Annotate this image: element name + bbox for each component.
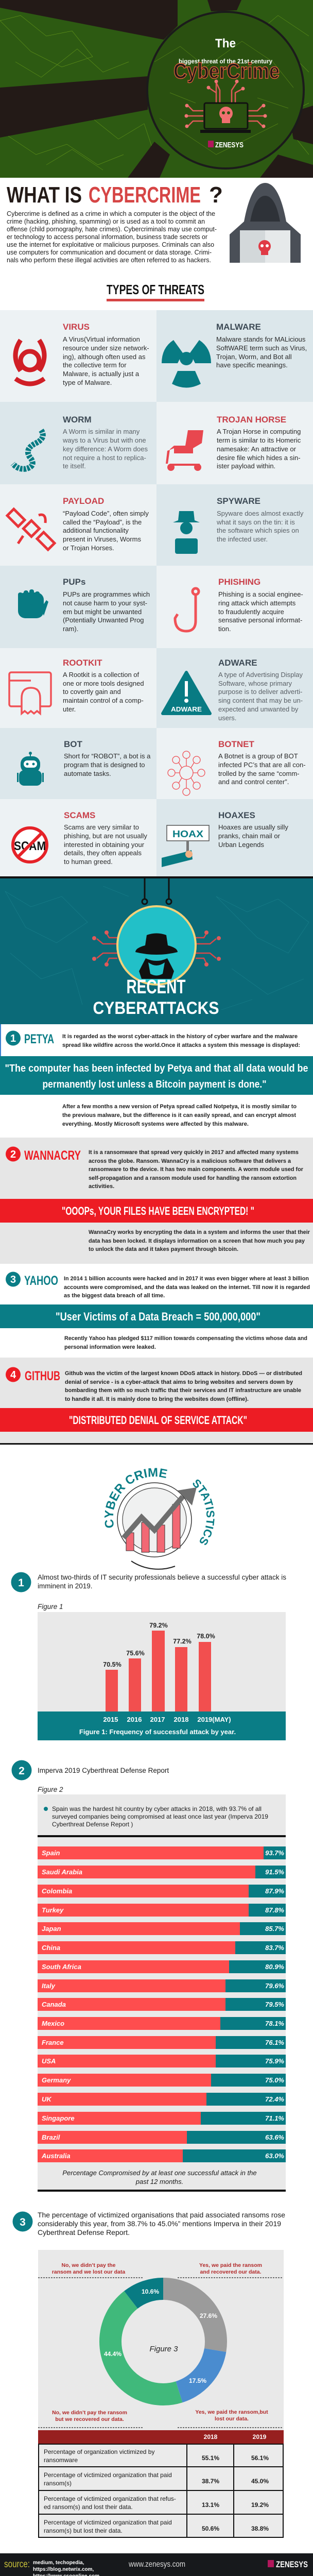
card: payload: additional functionality bbox=[63, 527, 129, 534]
bar chart: percentage compromised by country: Spain was the hardest hit country by cyber attacks in 2018, with 93.7% of all bbox=[52, 1805, 262, 1812]
attack 2: wannacry: activities. bbox=[89, 1183, 114, 1190]
card: scams: to human greed. bbox=[64, 858, 113, 866]
card: hoaxes: pranks, chain mail or bbox=[218, 832, 281, 840]
text block: notpetya: After a few months a new version of Petya spread called Notpetya, it is mostly similar to bbox=[62, 1104, 297, 1110]
bar chart: percentage compromised by country: UK bbox=[42, 2095, 52, 2103]
title: The biggest threat CyberCrime bbox=[173, 37, 280, 83]
card: payload: PAYLOAD bbox=[63, 496, 104, 506]
stat 2: imperva report: Figure 2 bbox=[38, 1786, 63, 1793]
card: phishing: to fraudulently acquire bbox=[218, 608, 284, 616]
stat 2: imperva report bbox=[11, 1760, 169, 1793]
text block: cybercrime definition: use the internet for exploitative or malicious purposes. Criminals can also bbox=[7, 241, 214, 248]
stat 3: ransom payments: Cyberthreat Defense Report. bbox=[38, 2228, 130, 2236]
table: ransomware statistics 2018 vs 2019: 13.1% bbox=[202, 2501, 219, 2509]
bar chart: frequency of successful attack by year: 70.5% bbox=[103, 1661, 121, 1668]
title: The biggest threat CyberCrime: CyberCrime bbox=[173, 59, 280, 83]
card: virus bbox=[15, 322, 149, 386]
table: ransomware statistics 2018 vs 2019: ransom(s) bbox=[44, 2480, 72, 2487]
donut chart: figure 3 ransom outcomes: 17.5% bbox=[189, 2377, 206, 2384]
callout: encrypted banner bbox=[0, 1199, 313, 1223]
bar chart: percentage compromised by country: past 12 months. bbox=[135, 2178, 183, 2185]
card: adware: sing content that may be un- bbox=[218, 697, 303, 704]
bar chart: percentage compromised by country: 72.4% bbox=[265, 2095, 284, 2103]
card: malware: have specific meanings. bbox=[216, 361, 288, 369]
bar chart: frequency of successful attack by year: 2017 bbox=[150, 1716, 165, 1723]
card: bot: BOT bbox=[64, 739, 82, 749]
bar chart: frequency of successful attack by year: 2019(MAY) bbox=[197, 1716, 231, 1723]
bar chart: frequency of successful attack by year: 75.6% bbox=[126, 1650, 145, 1657]
card: PUPs bbox=[18, 577, 150, 633]
table: ransomware statistics 2018 vs 2019: Percentage of organization victimized by bbox=[44, 2448, 154, 2455]
attack 4: github bbox=[0, 1358, 313, 1408]
bar chart: frequency of successful attack by year: Figure 1: Frequency of successful attack by year. bbox=[79, 1728, 236, 1736]
card: scams: interested in obtaining your bbox=[64, 841, 145, 849]
title: The biggest threat CyberCrime: biggest threat of the 21st century bbox=[179, 58, 272, 65]
icon: cyber crime statistics badge: STATISTICS bbox=[193, 1480, 215, 1545]
bar chart: percentage compromised by country: 71.1% bbox=[265, 2114, 284, 2122]
card: trojan horse: A Trojan Horse in computing bbox=[217, 428, 301, 435]
heading: recent cyberattacks bbox=[93, 976, 219, 1018]
card: botnet: and and control center”. bbox=[218, 778, 289, 786]
bar chart: percentage compromised by country: USA bbox=[42, 2057, 56, 2065]
attack 2: wannacry: ransomware to the device. It has two main components. A worm module used for bbox=[89, 1166, 304, 1173]
attack 1: petya: 1 bbox=[10, 1033, 16, 1044]
card: virus: type of Malware. bbox=[63, 379, 112, 386]
card: rootkit: A Rootkit is a collection of bbox=[63, 671, 140, 679]
bar chart: percentage compromised by country: Australia bbox=[41, 2152, 71, 2160]
stat 2: imperva report: 2 bbox=[19, 1765, 25, 1777]
stat 2: imperva report: Imperva 2019 Cyberthreat Defense Report bbox=[38, 1767, 169, 1774]
stat 3: ransom payments: The percentage of victimized organisations that paid associated ransoms rose bbox=[38, 2211, 285, 2219]
card: spyware bbox=[173, 496, 304, 554]
bar chart: percentage compromised by country: 76.1% bbox=[265, 2039, 284, 2046]
bar chart: percentage compromised by country: China bbox=[42, 1944, 60, 1952]
stat 1: attack imminent bbox=[11, 1572, 286, 1611]
bar chart: percentage compromised by country: South Africa bbox=[42, 1963, 81, 1971]
card: phishing: sensative personal informat- bbox=[218, 616, 302, 624]
donut chart: figure 3 ransom outcomes: but we recovered our data. bbox=[55, 2416, 124, 2422]
card: hoaxes: HOAX bbox=[172, 829, 203, 839]
table: ransomware statistics 2018 vs 2019: 50.6% bbox=[202, 2525, 219, 2532]
card: hoaxes bbox=[162, 810, 288, 867]
card: PUPs: ram). bbox=[63, 625, 78, 633]
donut chart: figure 3 ransom outcomes: Figure 3 bbox=[149, 2345, 178, 2353]
donut chart: figure 3 ransom outcomes: 10.6% bbox=[142, 2288, 159, 2295]
icon: hand bbox=[18, 589, 48, 618]
attack 4: github: bombarding them with so much traffic that their services and IT infrastructure are unable bbox=[65, 1387, 301, 1394]
attack 1: petya: spread like wildfire across the world.Once it attacks a system this message is displayed: bbox=[62, 1042, 300, 1048]
card: worm: key difference: A Worm does bbox=[63, 445, 148, 453]
text block: cybercrime definition bbox=[7, 210, 217, 264]
table: ransomware statistics 2018 vs 2019: 2019 bbox=[253, 2433, 267, 2441]
attack 4: github: 4 bbox=[10, 1369, 16, 1381]
icon: cyber crime statistics badge bbox=[104, 1468, 215, 1570]
card: bot bbox=[17, 739, 151, 786]
card: virus: A Virus(Virtual information bbox=[63, 335, 140, 343]
attack 1: petya: It is regarded as the worst cyber-attack in the history of cyber warfare and the malware bbox=[62, 1033, 298, 1040]
donut chart: figure 3 ransom outcomes: ransom and we lost our data bbox=[52, 2269, 125, 2275]
card: PUPs: not cause harm to your syst- bbox=[63, 599, 147, 607]
table: ransomware statistics 2018 vs 2019: 38.7% bbox=[202, 2478, 219, 2485]
table: ransomware statistics 2018 vs 2019: 55.1% bbox=[202, 2454, 219, 2462]
donut chart: figure 3 ransom outcomes: and recovered our data. bbox=[200, 2269, 262, 2275]
bar chart: percentage compromised by country: 80.9% bbox=[265, 1963, 284, 1971]
text block: notpetya: everything. Mostly Microsoft systems were affected by this malware. bbox=[62, 1121, 249, 1127]
card: rootkit: to covertly gain and bbox=[63, 688, 121, 696]
icon: hoax sign bbox=[167, 825, 209, 841]
callout: petya quote: permanently lost unless a Bitcoin payment is done." bbox=[42, 1079, 267, 1090]
heading: What is cybercrime: CYBERCRIME bbox=[89, 182, 201, 208]
card: hoaxes: HOAXES bbox=[218, 810, 255, 820]
bar chart: percentage compromised by country: 85.7% bbox=[265, 1925, 284, 1933]
card: scams: SCAM bbox=[14, 839, 46, 853]
attack 3: yahoo: In 2014 1 billion accounts were hacked and in 2017 it was even bigger where at least 3 billion bbox=[64, 1276, 309, 1282]
icon: robot bbox=[17, 752, 44, 786]
card: malware bbox=[162, 322, 307, 387]
attack 1: petya: PETYA bbox=[24, 1032, 54, 1046]
card: trojan horse: namesake: An attractive or bbox=[217, 445, 297, 453]
card: adware: expected and unwanted by bbox=[218, 705, 299, 713]
card: rootkit: ROOTKIT bbox=[63, 658, 102, 668]
donut chart: figure 3 ransom outcomes: No, we didn’t pay the bbox=[61, 2262, 116, 2268]
bar chart: frequency of successful attack by year bbox=[38, 1612, 286, 1740]
table: ransomware statistics 2018 vs 2019: 19.2% bbox=[251, 2501, 269, 2509]
bar chart: percentage compromised by country: Colombia bbox=[42, 1887, 72, 1895]
callout: ddos banner: "DISTRIBUTED DENIAL OF SERVICE ATTACK" bbox=[69, 1414, 247, 1427]
bar chart: percentage compromised by country: France bbox=[42, 2039, 64, 2046]
text block: yahoo compensation: personal information were leaked. bbox=[64, 1344, 156, 1350]
icon: cyber crime statistics badge: CYBER CRIME bbox=[104, 1468, 167, 1528]
text block: cybercrime definition: er technology to access personal information, business trade secrets or bbox=[7, 233, 207, 241]
icon: botnet bbox=[168, 751, 205, 795]
bar chart: frequency of successful attack by year: 79.2% bbox=[149, 1622, 168, 1629]
icon: hook bbox=[175, 588, 199, 631]
card: PUPs: PUPs are programmes which bbox=[63, 590, 150, 598]
card: worm bbox=[13, 415, 148, 470]
card: spyware: SPYWARE bbox=[217, 496, 260, 506]
heading: What is cybercrime bbox=[7, 182, 223, 208]
icon: worm bbox=[13, 430, 43, 469]
card: worm: ways to a Virus but with one bbox=[62, 436, 146, 444]
bar chart: percentage compromised by country: 79.6% bbox=[265, 1982, 284, 1990]
callout: yahoo victims: "User Victims of a Data Breach = 500,000,000" bbox=[56, 1310, 260, 1323]
card: virus: Malware, is actually just a bbox=[63, 370, 140, 378]
bar chart: percentage compromised by country: 79.5% bbox=[265, 2001, 284, 2008]
bar chart: percentage compromised by country bbox=[38, 1794, 286, 2192]
card: payload bbox=[7, 496, 149, 552]
table: ransomware statistics 2018 vs 2019: Percentage of victimized organization that paid bbox=[44, 2519, 172, 2526]
bar chart: percentage compromised by country: Germany bbox=[42, 2076, 71, 2084]
card: adware: Software, whose primary bbox=[218, 680, 292, 687]
card: bot: automate tasks. bbox=[64, 770, 111, 777]
card: trojan horse bbox=[166, 415, 301, 471]
bar chart: percentage compromised by country: Saudi Arabia bbox=[42, 1868, 82, 1876]
card: adware: users. bbox=[218, 714, 236, 722]
text block: wannacry works: to unlock the data and it takes payment through bitcoin. bbox=[89, 1246, 238, 1252]
card: adware: purpose is to deliver adverti- bbox=[218, 688, 302, 696]
bar chart: percentage compromised by country: Brazil bbox=[42, 2133, 60, 2141]
card: hoaxes: Urban Legends bbox=[218, 841, 264, 849]
card: bot: Short for “ROBOT”, a bot is a bbox=[64, 752, 151, 760]
bar chart: frequency of successful attack by year: 2018 bbox=[174, 1716, 188, 1723]
donut chart: figure 3 ransom outcomes: lost our data. bbox=[215, 2416, 249, 2422]
bar chart: percentage compromised by country: 91.5% bbox=[265, 1868, 284, 1876]
card: trojan horse: ister payload within. bbox=[217, 462, 275, 470]
table: ransomware statistics 2018 vs 2019: 38.8% bbox=[251, 2525, 269, 2532]
title: The biggest threat CyberCrime: The bbox=[215, 37, 236, 50]
icon: radiation bbox=[162, 340, 211, 387]
card: adware: A type of Advertising Display bbox=[218, 671, 303, 679]
stat 1: attack imminent: imminent in 2019. bbox=[38, 1582, 93, 1590]
card: rootkit: uter. bbox=[63, 705, 76, 713]
logo: ZENESYS header: ZENESYS bbox=[215, 141, 244, 149]
attack 4: github: Github was the victim of the largest known DDoS attack in history. DDoS — or distributed bbox=[65, 1370, 302, 1377]
footer website: www.zenesys.com bbox=[128, 2560, 185, 2569]
bar chart: percentage compromised by country: 75.9% bbox=[265, 2057, 284, 2065]
icon: satellite bbox=[7, 509, 55, 550]
attack 2: wannacry: 2 bbox=[10, 1149, 16, 1160]
attack 4: github: to handle it all. It is mainly done to bring the websites down (offline). bbox=[65, 1396, 249, 1402]
card: malware: MALWARE bbox=[216, 322, 261, 332]
bar chart: percentage compromised by country: Singapore bbox=[42, 2114, 75, 2122]
card: spyware: the infected user. bbox=[217, 535, 268, 543]
bar chart: frequency of successful attack by year: 77.2% bbox=[173, 1638, 192, 1645]
card: bot: program that is designed to bbox=[64, 761, 145, 769]
callout: petya quote bbox=[0, 1056, 313, 1095]
attack 4: github: denial of service - is a cyber-attack that aims to bring websites and servers down by bbox=[65, 1379, 293, 1385]
card: adware: ADWARE bbox=[171, 705, 202, 713]
callout: yahoo victims bbox=[0, 1304, 313, 1328]
card: virus: VIRUS bbox=[63, 322, 90, 332]
card: PUPs: (Potentially Unwanted Prog bbox=[63, 616, 144, 624]
icon: hacker in circle with wires bbox=[92, 878, 221, 985]
card: adware: ADWARE bbox=[218, 658, 257, 668]
text block: notpetya bbox=[62, 1104, 297, 1127]
card: scams: details, they often appeals bbox=[64, 849, 142, 857]
bar chart: percentage compromised by country: surveyed companies being compromised at least once last year (Imperva 2019 bbox=[52, 1813, 268, 1820]
bar chart: percentage compromised by country: Turkey bbox=[42, 1906, 64, 1914]
heading: What is cybercrime: WHAT IS bbox=[7, 182, 82, 208]
stat 1: attack imminent: Figure 1 bbox=[38, 1603, 63, 1611]
table: ransomware statistics 2018 vs 2019: ransom(s) but lost their data. bbox=[44, 2527, 123, 2534]
card: PUPs: em but might be unwanted bbox=[63, 608, 142, 616]
text block: wannacry works: data has been locked. It displays information on a screen that how much you pay bbox=[89, 1238, 305, 1244]
heading: recent cyberattacks: RECENT bbox=[127, 976, 185, 998]
bar chart: percentage compromised by country: 63.0% bbox=[265, 2152, 284, 2160]
footer sources: source: bbox=[4, 2559, 30, 2570]
card: spyware: what it says on the tin: it is bbox=[216, 518, 295, 526]
card: malware: SoftWARE term such as Virus, bbox=[216, 344, 307, 352]
heading: recent cyberattacks: CYBERATTACKS bbox=[93, 998, 219, 1018]
card: adware bbox=[163, 658, 303, 722]
text block: notpetya: the previous malware, but the difference is it can easily spread, and can encrypt almost bbox=[62, 1112, 296, 1118]
card: payload: present in Viruses, Worms bbox=[63, 535, 141, 543]
table: ransomware statistics 2018 vs 2019: 45.0% bbox=[251, 2478, 269, 2485]
card: spyware: Spyware does almost exactly bbox=[217, 510, 304, 517]
card: botnet bbox=[168, 739, 306, 795]
stat 3: ransom payments bbox=[12, 2211, 285, 2236]
donut chart: figure 3 ransom outcomes: No, we didn’t pay the ransom bbox=[52, 2410, 127, 2416]
bar chart: percentage compromised by country: 83.7% bbox=[265, 1944, 284, 1952]
card: worm: te itself. bbox=[63, 462, 86, 470]
bar chart: frequency of successful attack by year: 2015 bbox=[103, 1716, 118, 1723]
icon: spy bbox=[173, 511, 200, 554]
icon: trojan horse bbox=[166, 430, 203, 471]
bar chart: frequency of successful attack by year: 78.0% bbox=[197, 1633, 215, 1640]
text block: wannacry works: WannaCry works by encrypting the data in a system and informs the user that their bbox=[89, 1229, 310, 1235]
heading: types of threats: TYPES OF THREATS bbox=[107, 282, 204, 297]
donut chart: figure 3 ransom outcomes bbox=[38, 2250, 284, 2430]
card: botnet: A Botnet is a group of BOT bbox=[218, 752, 298, 760]
table: ransomware statistics 2018 vs 2019: 56.1% bbox=[251, 2454, 269, 2462]
bar chart: percentage compromised by country: Japan bbox=[42, 1925, 61, 1933]
attack 4: github: GITHUB bbox=[25, 1369, 60, 1383]
card: scams: SCAMS bbox=[64, 810, 95, 820]
card: malware: Trojan, Worm, and Bot all bbox=[216, 353, 292, 361]
bar chart: percentage compromised by country: Cyberthreat Defense Report ) bbox=[52, 1821, 133, 1828]
attack 3: yahoo: YAHOO bbox=[24, 1274, 58, 1288]
icon: no scam bbox=[13, 828, 47, 862]
bar chart: percentage compromised by country: Italy bbox=[42, 1982, 56, 1990]
card: payload: “Payload Code”, often simply bbox=[63, 510, 149, 517]
attack 3: yahoo: accounts were compromised, and the data was leaked on the internet. Till now it is regarded bbox=[64, 1284, 310, 1291]
text block: cybercrime definition: use computers for communication and document or data storage. Crimi- bbox=[7, 249, 212, 256]
attack 2: wannacry: It is a ransomware that spread very quickly in 2017 and affected many systems bbox=[89, 1149, 299, 1156]
card: rootkit: maintain control of a comp- bbox=[63, 697, 144, 704]
card: virus: resource under size network- bbox=[63, 344, 149, 352]
icon: skull laptop with circuits bbox=[184, 79, 267, 133]
card: virus: the collective term for bbox=[63, 361, 127, 369]
table: ransomware statistics 2018 vs 2019: ed ransom(s) and lost their data. bbox=[44, 2503, 133, 2511]
card: malware: Malware stands for MALicious bbox=[216, 335, 306, 343]
stat 1: attack imminent: Almost two-thirds of IT security professionals believe a successful cyber attack is bbox=[38, 1573, 286, 1581]
card: worm: A Worm is similar in many bbox=[63, 428, 140, 435]
heading: types of threats bbox=[107, 282, 204, 301]
footer sources: https://blog.netwrix.com, bbox=[33, 2567, 94, 2572]
card: phishing: Phishing is a social enginee- bbox=[218, 590, 303, 598]
card: scams: phishing, but are not usually bbox=[64, 832, 147, 840]
card: PUPs: PUPs bbox=[63, 577, 85, 587]
bar chart: percentage compromised by country: Spain bbox=[42, 1849, 60, 1857]
stat 1: attack imminent: 1 bbox=[18, 1577, 24, 1589]
card: phishing: tion. bbox=[218, 625, 231, 633]
text block: wannacry works bbox=[0, 1223, 313, 1264]
card: hoaxes: Hoaxes are usually silly bbox=[218, 823, 288, 831]
bar chart: percentage compromised by country: Mexico bbox=[42, 2020, 64, 2027]
footer sources: medium, techopedia, bbox=[33, 2560, 84, 2566]
donut chart: figure 3 ransom outcomes: 44.4% bbox=[104, 2350, 121, 2358]
bar chart: percentage compromised by country: Percentage Compromised by at least one successful attack in the bbox=[62, 2169, 257, 2177]
card: scams bbox=[13, 810, 147, 866]
attack 2: wannacry: WANNACRY bbox=[24, 1148, 81, 1163]
card: rootkit: one or more tools designed bbox=[63, 680, 144, 687]
table: ransomware statistics 2018 vs 2019: ransomware bbox=[44, 2456, 78, 2464]
card: worm: WORM bbox=[63, 415, 92, 425]
donut chart: figure 3 ransom outcomes: 27.6% bbox=[200, 2312, 217, 2319]
stat 3: ransom payments: 3 bbox=[20, 2216, 26, 2228]
panel: threats grid bbox=[0, 310, 313, 877]
donut chart: figure 3 ransom outcomes: Yes, we paid the ransom,but bbox=[195, 2409, 268, 2415]
card: botnet: BOTNET bbox=[218, 739, 254, 749]
attack 3: yahoo: 3 bbox=[10, 1274, 16, 1285]
footer sources bbox=[4, 2559, 101, 2576]
card: payload: called the “Payload”, is the bbox=[63, 518, 142, 526]
footer bbox=[0, 2553, 313, 2576]
text block: yahoo compensation: Recently Yahoo has pledged $117 million towards compensating the victims whose data and bbox=[64, 1335, 307, 1342]
card: trojan horse: desire file which hides a sin- bbox=[217, 454, 301, 462]
card: phishing bbox=[175, 577, 303, 633]
table: ransomware statistics 2018 vs 2019 bbox=[38, 2430, 284, 2537]
bar chart: frequency of successful attack by year: 2016 bbox=[127, 1716, 142, 1723]
card: phishing: ring attack which attempts bbox=[218, 599, 296, 607]
table: ransomware statistics 2018 vs 2019: 2018 bbox=[204, 2433, 218, 2441]
card: trojan horse: TROJAN HORSE bbox=[217, 415, 286, 425]
icon: biohazard bbox=[15, 340, 44, 384]
card: virus: ing), although often used as bbox=[63, 353, 146, 361]
icon: ghost window bbox=[9, 672, 51, 714]
card: botnet: trolled by the same “comm- bbox=[218, 770, 300, 777]
table: ransomware statistics 2018 vs 2019: Percentage of victimized organization that paid bbox=[44, 2471, 172, 2479]
panel: recent cyberattacks banner bbox=[0, 876, 313, 1024]
attack 2: wannacry bbox=[0, 1138, 313, 1199]
attack 3: yahoo: as the biggest data breach of all time. bbox=[64, 1293, 165, 1299]
text block: cybercrime definition: offense (child pornography, hate crimes). Cybercriminals may use comput- bbox=[7, 226, 217, 233]
attack 2: wannacry: across the globe. Ransom. WannaCry is a malicious software that delivers a bbox=[89, 1158, 291, 1164]
card: scams: Scams are very similar to bbox=[64, 823, 139, 831]
bar chart: percentage compromised by country: 93.7% bbox=[265, 1849, 284, 1857]
bar chart: percentage compromised by country: 63.6% bbox=[265, 2133, 284, 2141]
callout: ddos banner bbox=[0, 1408, 313, 1445]
heading: What is cybercrime: ? bbox=[209, 182, 223, 208]
card: phishing: PHISHING bbox=[218, 577, 260, 587]
attack 1: petya bbox=[0, 1024, 313, 1056]
card: spyware: the software which spies on bbox=[217, 527, 299, 534]
bar chart: percentage compromised by country: 75.0% bbox=[265, 2076, 284, 2084]
bar chart: percentage compromised by country: 78.1% bbox=[265, 2020, 284, 2027]
bar chart: percentage compromised by country: Canada bbox=[42, 2001, 66, 2008]
card: payload: or Trojan Horses. bbox=[63, 544, 114, 552]
header banner bbox=[0, 0, 313, 178]
card: rootkit bbox=[9, 658, 144, 714]
attack 3: yahoo bbox=[6, 1272, 310, 1299]
attack 2: wannacry: self-propagation and a ransom module used for handling the ransom extortion bbox=[89, 1175, 297, 1181]
bar chart: percentage compromised by country: 87.9% bbox=[265, 1887, 284, 1895]
icon: warning triangle bbox=[163, 672, 210, 714]
card: trojan horse: term is similar to its Homeric bbox=[217, 436, 301, 444]
logo: ZENESYS header bbox=[208, 141, 244, 149]
bar chart: percentage compromised by country: 87.8% bbox=[265, 1906, 284, 1914]
donut chart: figure 3 ransom outcomes: Yes, we paid the ransom bbox=[199, 2262, 262, 2268]
card: worm: not require a host to replica- bbox=[63, 454, 146, 462]
text block: cybercrime definition: nals who perform these illegal activities are often referred to as hackers. bbox=[7, 257, 211, 264]
text block: cybercrime definition: crime (hacking, phishing, spamming) or is used as a tool to commit an bbox=[7, 218, 205, 225]
card: botnet: infected PC’s that are all con- bbox=[218, 761, 306, 769]
icon: hooded hacker bbox=[230, 183, 301, 263]
stat 3: ransom payments: considerably this year, from 38.7% to 45.0%” mentions Imperva in their 2019 bbox=[38, 2219, 281, 2228]
text block: yahoo compensation bbox=[64, 1335, 307, 1350]
table: ransomware statistics 2018 vs 2019: Percentage of victimized organization that refus- bbox=[44, 2495, 176, 2502]
text block: cybercrime definition: Cybercrime is defined as a crime in which a computer is the object of the bbox=[7, 210, 215, 217]
